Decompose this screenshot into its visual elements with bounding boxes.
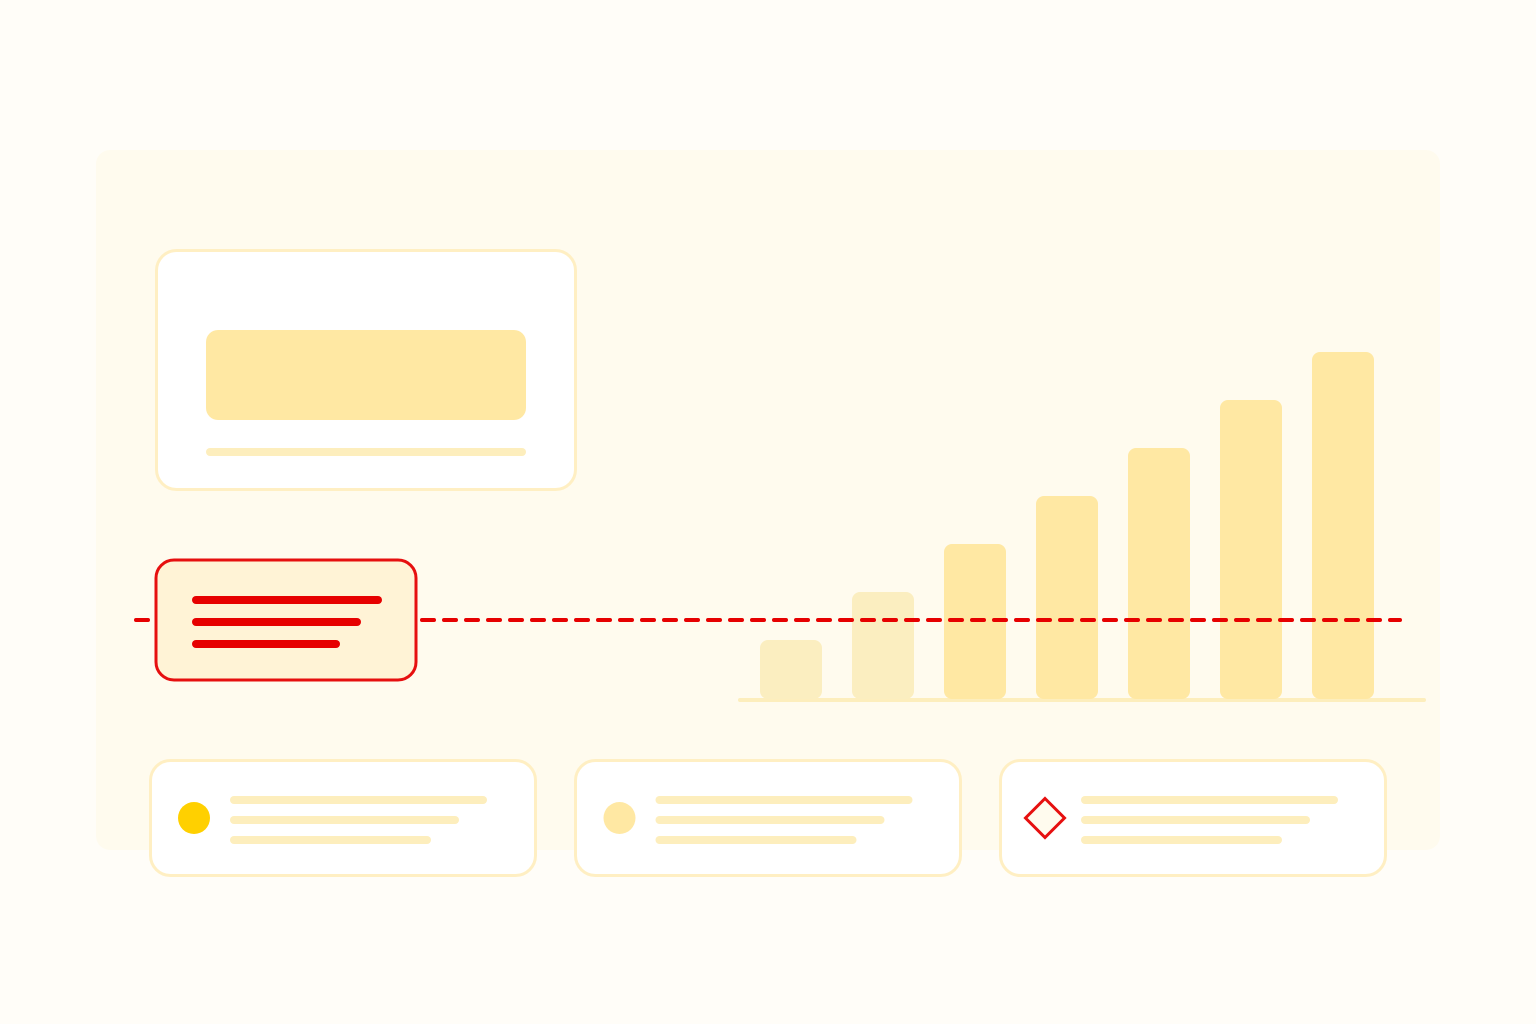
panel: background (96, 150, 1440, 850)
legend text lines (230, 796, 487, 844)
icon: pale circle (604, 802, 636, 834)
bar 4 (1036, 496, 1098, 699)
heading block (206, 330, 526, 420)
icon: gold circle (178, 802, 210, 834)
bar 7 (1312, 352, 1374, 699)
callout: threshold label (156, 560, 416, 680)
legend card 3 (1000, 760, 1386, 876)
callout line 1 (192, 596, 382, 604)
bar 6 (1220, 400, 1282, 699)
chart baseline (738, 698, 1426, 702)
legend card 1 (150, 760, 536, 876)
callout line 3 (192, 640, 340, 648)
threshold dashed line (136, 618, 1400, 622)
bar 2 (852, 592, 914, 699)
caption line (206, 448, 526, 456)
legend text lines (656, 796, 912, 844)
legend text lines (1081, 796, 1338, 844)
bar chart (738, 352, 1426, 702)
legend card 2 (576, 760, 960, 876)
icon: red diamond (1026, 798, 1064, 838)
bar 1 (760, 640, 822, 699)
callout line 2 (192, 618, 361, 626)
bar 5 (1128, 448, 1190, 699)
bar 3 (944, 544, 1006, 699)
panel: top-left card (156, 250, 576, 490)
